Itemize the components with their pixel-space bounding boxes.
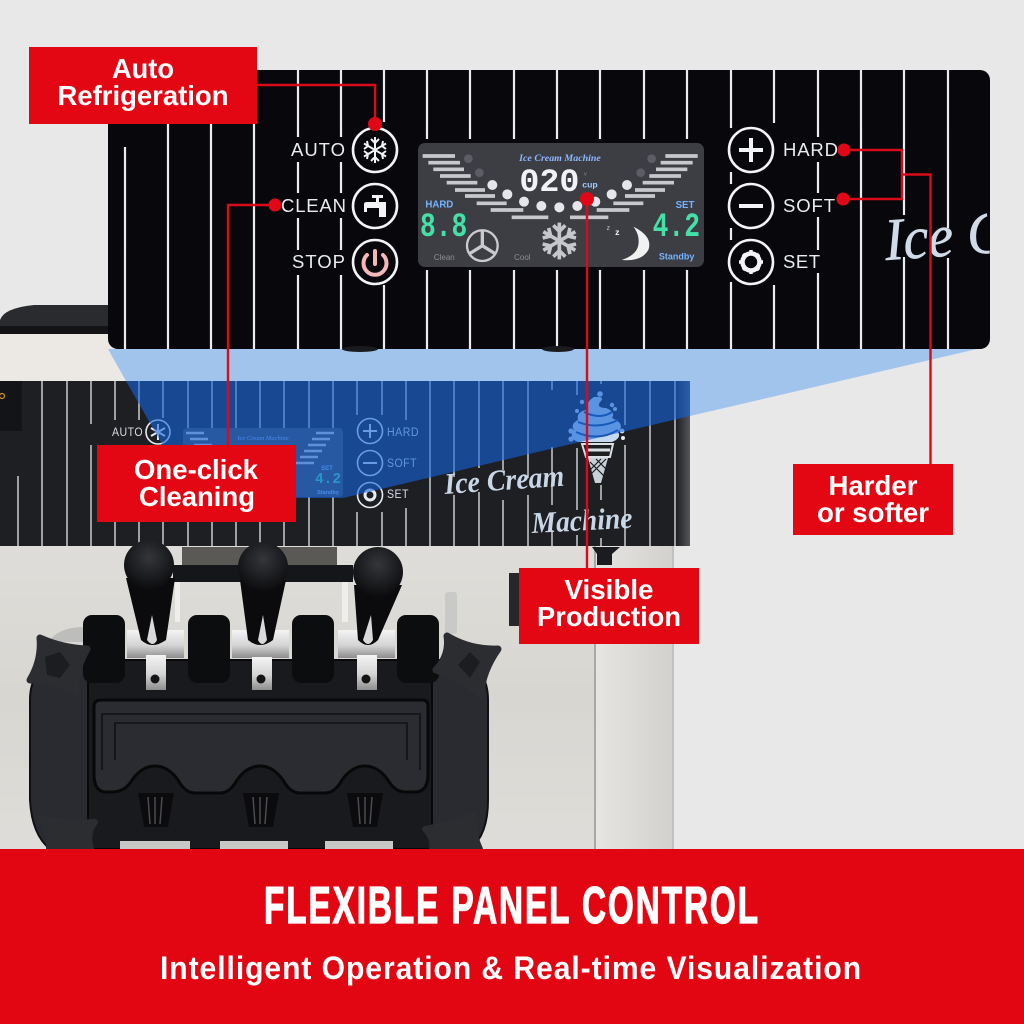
handle two: [238, 542, 288, 645]
bottom banner: [0, 849, 1024, 1024]
small panel script text: [442, 460, 633, 540]
machine body: [0, 305, 690, 849]
main black plate: [30, 660, 488, 849]
black blocks: [83, 615, 439, 683]
panel script text: Ice C: [881, 199, 1008, 273]
metal pin: [445, 592, 457, 634]
rear sign and cord: [509, 547, 620, 626]
LCD wings: [423, 156, 698, 217]
button: plus: [729, 128, 773, 172]
small display: Ice Cream Machine: [236, 435, 289, 442]
small control panel on machine: [0, 381, 690, 546]
knob bottom right: [425, 815, 480, 849]
subheading: Intelligent Operation & Real-time Visualization: [160, 950, 862, 986]
panel labels: AUTO: [291, 139, 345, 160]
LCD hard label: HARD: [425, 199, 453, 210]
callout: auto refrigeration: Auto: [112, 53, 174, 84]
LCD sleep marks: z: [606, 223, 610, 232]
LCD moon: [622, 227, 649, 260]
LCD display: v: [584, 171, 587, 177]
callout: harder or softer: [793, 464, 953, 535]
bottom clips: [120, 841, 393, 849]
small panel labels: SOFT: [387, 458, 417, 470]
callout: one-click cleaning: One-click: [134, 454, 259, 485]
handle one: [124, 540, 175, 645]
knob top left: [30, 638, 87, 692]
LCD snowflake: [543, 223, 576, 259]
LCD right number: 4.2: [653, 208, 700, 247]
small panel labels: HARD: [387, 427, 419, 439]
blue zoom projection beam: part over panel: [126, 381, 690, 498]
panel labels: SOFT: [783, 195, 835, 216]
LCD title: Ice Cream Machine: [518, 153, 601, 163]
small panel script text: Ice Cream: [442, 460, 565, 501]
chrome crossbars: [127, 630, 395, 690]
button: auto snowflake: [353, 128, 397, 172]
small display: 4.2: [315, 471, 341, 488]
small display: 020: [248, 449, 278, 468]
ice cream cone logo: [568, 391, 625, 483]
callout anchor dots: [268, 117, 850, 212]
callout connector lines: [228, 85, 930, 568]
LCD unit: cup: [582, 180, 598, 190]
LCD clean label: Clean: [434, 253, 455, 262]
LCD standby label: Standby: [659, 251, 694, 261]
panel bumps: [342, 346, 574, 352]
LCD left number: 8.8: [420, 208, 467, 247]
button: stop power: [353, 240, 397, 284]
LCD main number: 020: [519, 164, 579, 201]
callout: visible production: Visible: [564, 574, 654, 605]
LCD cool label: Cool: [514, 253, 531, 262]
small panel script text: Machine: [530, 502, 633, 540]
dispenser assembly: [30, 540, 620, 849]
small panel labels: AUTO: [112, 427, 143, 439]
panel labels: CLEAN: [281, 195, 346, 216]
callout: one-click cleaning: Cleaning: [139, 481, 255, 512]
recessed panel: [94, 700, 428, 793]
small panel labels: [112, 427, 419, 501]
knob bottom left: [41, 819, 95, 849]
small panel labels: SET: [387, 489, 409, 501]
callout: harder or softer: Harder: [828, 470, 918, 501]
small panel buttons: [146, 418, 382, 508]
knob top right: [436, 636, 498, 694]
callout: one-click cleaning: [97, 445, 296, 522]
small display: [183, 428, 343, 497]
panel labels: [281, 139, 838, 272]
LCD display: [418, 143, 704, 267]
callout: auto refrigeration: Refrigeration: [58, 80, 228, 111]
button: minus: [729, 184, 773, 228]
panel labels: HARD: [783, 139, 838, 160]
large control panel: [108, 70, 1008, 352]
recess inner contour: [102, 714, 420, 770]
small display: Standby: [317, 490, 340, 496]
heading: FLEXIBLE PANEL CONTROL: [264, 877, 760, 935]
LCD set label: SET: [676, 200, 694, 211]
panel stripes: [125, 70, 948, 349]
LCD sleep dot: z: [615, 227, 620, 237]
panel labels: STOP: [292, 251, 345, 272]
handle three: [353, 547, 403, 645]
callout: visible production: Production: [537, 601, 681, 632]
rear bar: [173, 547, 353, 622]
valves: [138, 793, 383, 827]
callout: visible production: [519, 568, 699, 644]
blue zoom projection beam: light part: [108, 349, 977, 416]
LCD snow dots: [487, 180, 632, 212]
chrome holes: [150, 674, 370, 684]
chrome arc: [50, 627, 84, 642]
button: clean faucet: [353, 184, 397, 228]
button: set gear: [729, 240, 773, 284]
LCD faint flakes: [464, 154, 656, 177]
panel labels: SET: [783, 251, 820, 272]
small display: SET: [321, 466, 333, 472]
LCD clean fan icon: [467, 230, 498, 261]
callout: harder or softer: or softer: [817, 497, 929, 528]
callout: auto refrigeration: [29, 47, 257, 124]
